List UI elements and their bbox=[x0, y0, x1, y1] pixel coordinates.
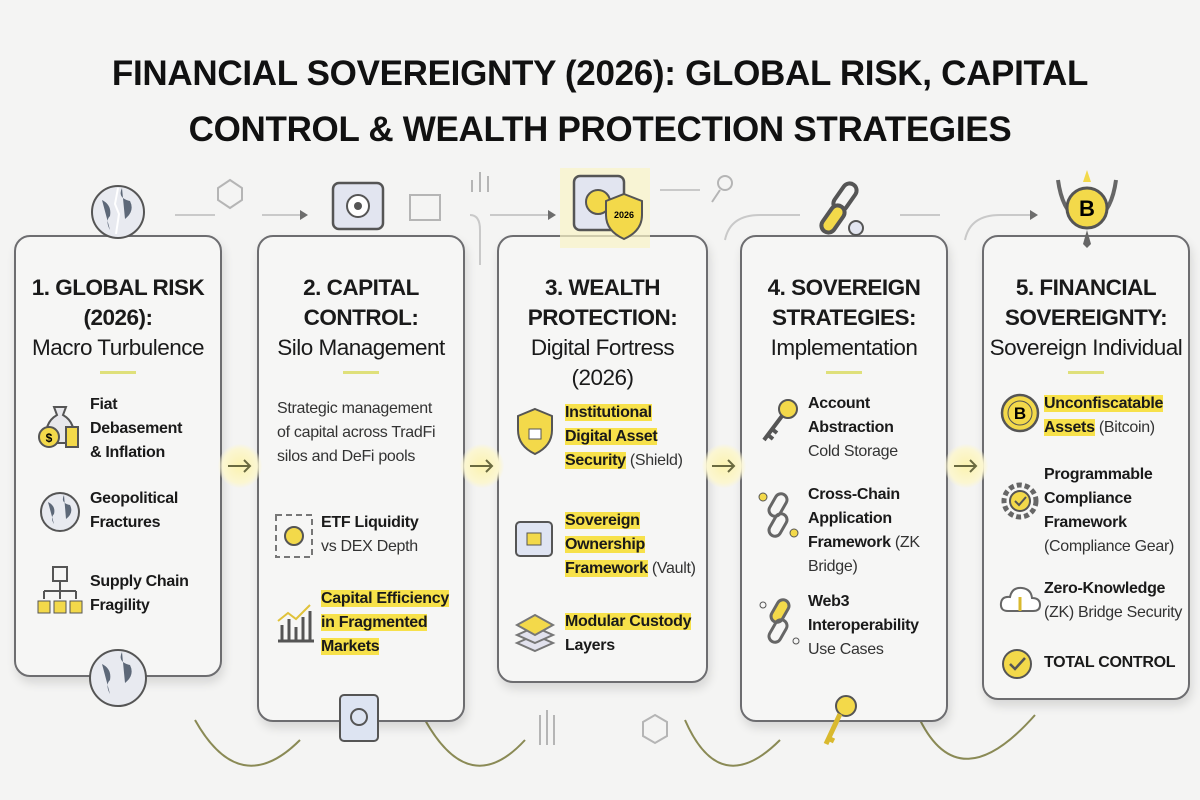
item: programmable compliance: Framework bbox=[1044, 514, 1127, 531]
icon: supply boxes bbox=[38, 566, 82, 614]
description: of capital across TradFi bbox=[277, 424, 435, 441]
title bbox=[112, 54, 1088, 149]
panel 3: wealth protection bbox=[497, 235, 708, 683]
item: web3: Web3 bbox=[808, 593, 849, 610]
item: capital efficiency: Markets bbox=[321, 638, 379, 655]
item: ETF liquidity: ETF Liquidity bbox=[321, 514, 418, 531]
bottom icon: safe bbox=[338, 693, 380, 747]
icon: bitcoin: B bbox=[1014, 404, 1026, 423]
icon: chain links bbox=[760, 598, 800, 644]
item: capital efficiency: Capital Efficiency bbox=[321, 590, 449, 607]
heading 4: 4. SOVEREIGN bbox=[768, 275, 920, 300]
item: geopolitical: Geopolitical bbox=[90, 490, 178, 507]
icon: coin frame bbox=[275, 514, 313, 558]
item: sovereign ownership bbox=[565, 512, 696, 577]
bottom icon: key bbox=[820, 692, 860, 752]
heading 5: 5. FINANCIAL bbox=[1016, 275, 1156, 300]
description: silos and DeFi pools bbox=[277, 448, 415, 465]
icon: bitcoin bbox=[1000, 394, 1040, 432]
arrow 1 bbox=[218, 444, 262, 488]
heading 5 bbox=[990, 275, 1182, 360]
item: fiat debasement: Fiat bbox=[90, 396, 117, 413]
icon: vault bbox=[515, 521, 553, 557]
item: account abstraction: Abstraction bbox=[808, 419, 894, 436]
top icon: chain bbox=[819, 181, 864, 236]
heading 3: 3. WEALTH bbox=[545, 275, 660, 300]
item: unconfiscatable: Unconfiscatable bbox=[1044, 395, 1163, 412]
item: web3: Interoperability bbox=[808, 617, 919, 634]
title: CONTROL & WEALTH PROTECTION STRATEGIES bbox=[189, 110, 1011, 149]
item: modular custody: Layers bbox=[565, 637, 615, 654]
heading 2: CONTROL: bbox=[304, 305, 418, 330]
item: institutional: Institutional bbox=[565, 404, 652, 421]
top icon: safe with 2026 shield bbox=[560, 168, 650, 248]
item: fiat debasement: Debasement bbox=[90, 420, 182, 437]
arrow 4 bbox=[944, 444, 988, 488]
panel 2: capital control bbox=[257, 235, 465, 722]
arrow 3 bbox=[702, 444, 746, 488]
item: programmable compliance: Compliance bbox=[1044, 490, 1132, 507]
icon: check bbox=[1002, 649, 1032, 679]
item: capital efficiency bbox=[321, 590, 450, 655]
item: cross-chain: Framework (ZK bbox=[808, 534, 920, 551]
item: total control: TOTAL CONTROL bbox=[1044, 654, 1175, 671]
heading 1 bbox=[32, 275, 204, 360]
icon: chain bbox=[758, 492, 798, 538]
item: geopolitical bbox=[90, 490, 178, 531]
panel 5: financial sovereignty bbox=[982, 235, 1190, 700]
heading 2: Silo Management bbox=[277, 335, 445, 360]
icon: shield bbox=[517, 408, 553, 456]
heading 3: (2026) bbox=[571, 365, 634, 390]
item: fiat debasement bbox=[90, 396, 182, 461]
top icon: safe with 2026 shield: 2026 bbox=[614, 210, 634, 220]
item: sovereign ownership: Framework (Vault) bbox=[565, 560, 696, 577]
heading 2: 2. CAPITAL bbox=[303, 275, 419, 300]
icon: money bag: $ bbox=[46, 431, 53, 445]
item: programmable compliance: (Compliance Gear) bbox=[1044, 538, 1174, 555]
item: fiat debasement: & Inflation bbox=[90, 444, 165, 461]
item: programmable compliance: Programmable bbox=[1044, 466, 1152, 483]
heading 3 bbox=[528, 275, 677, 390]
item: institutional: Digital Asset bbox=[565, 428, 657, 445]
item: unconfiscatable: Assets (Bitcoin) bbox=[1044, 419, 1155, 436]
panel 4: sovereign strategies bbox=[740, 235, 948, 722]
item: zero knowledge: (ZK) Bridge Security bbox=[1044, 604, 1182, 621]
item: web3 bbox=[808, 593, 919, 658]
icon: key bbox=[762, 399, 798, 442]
icon: cloud bbox=[1000, 586, 1041, 612]
item: modular custody: Modular Custody bbox=[565, 613, 691, 630]
item: web3: Use Cases bbox=[808, 641, 884, 658]
item: zero knowledge: Zero-Knowledge bbox=[1044, 580, 1165, 597]
icon: layers bbox=[514, 614, 556, 652]
item: sovereign ownership: Sovereign bbox=[565, 512, 640, 529]
heading 4 bbox=[768, 275, 920, 360]
heading 1: (2026): bbox=[83, 305, 153, 330]
icon: bar chart bbox=[277, 604, 314, 642]
item: unconfiscatable bbox=[1044, 395, 1163, 436]
heading 2 bbox=[277, 275, 446, 360]
item: supply chain: Supply Chain bbox=[90, 573, 189, 590]
item: institutional bbox=[565, 404, 683, 469]
item: supply chain bbox=[90, 573, 189, 614]
item: zero knowledge bbox=[1044, 580, 1182, 621]
item: cross-chain bbox=[808, 486, 920, 575]
item: cross-chain: Bridge) bbox=[808, 558, 857, 575]
heading 1: Macro Turbulence bbox=[32, 335, 204, 360]
panel 1: global risk bbox=[14, 235, 222, 677]
item: capital efficiency: in Fragmented bbox=[321, 614, 427, 631]
item: account abstraction bbox=[808, 395, 898, 460]
item: ETF liquidity bbox=[321, 514, 419, 555]
heading 4: Implementation bbox=[771, 335, 917, 360]
title: FINANCIAL SOVEREIGNTY (2026): GLOBAL RISK, CAPITAL bbox=[112, 54, 1088, 93]
item: supply chain: Fragility bbox=[90, 597, 150, 614]
arrow 2 bbox=[460, 444, 504, 488]
item: cross-chain: Application bbox=[808, 510, 892, 527]
description bbox=[277, 400, 435, 465]
icon: globe bbox=[40, 492, 80, 532]
item: account abstraction: Account bbox=[808, 395, 870, 412]
heading 3: Digital Fortress bbox=[531, 335, 674, 360]
icon: gear bbox=[1002, 482, 1038, 520]
item: cross-chain: Cross-Chain bbox=[808, 486, 900, 503]
heading 5: SOVEREIGNTY: bbox=[1005, 305, 1167, 330]
top icon: globe bbox=[91, 185, 145, 239]
item: programmable compliance bbox=[1044, 466, 1174, 555]
top icon: safe bbox=[332, 182, 384, 230]
heading 5: Sovereign Individual bbox=[990, 335, 1182, 360]
item: institutional: Security (Shield) bbox=[565, 452, 683, 469]
item: sovereign ownership: Ownership bbox=[565, 536, 645, 553]
item: geopolitical: Fractures bbox=[90, 514, 160, 531]
heading 3: PROTECTION: bbox=[528, 305, 677, 330]
item: ETF liquidity: vs DEX Depth bbox=[321, 538, 418, 555]
heading 1: 1. GLOBAL RISK bbox=[32, 275, 204, 300]
item: modular custody bbox=[565, 613, 692, 654]
description: Strategic management bbox=[277, 400, 432, 417]
icon: money bag bbox=[38, 406, 79, 448]
top icon: bitcoin badge: B bbox=[1079, 196, 1095, 221]
heading 4: STRATEGIES: bbox=[772, 305, 916, 330]
item: account abstraction: Cold Storage bbox=[808, 443, 898, 460]
bottom icon: globe bbox=[88, 640, 148, 716]
top icon: bitcoin badge bbox=[1052, 168, 1122, 250]
